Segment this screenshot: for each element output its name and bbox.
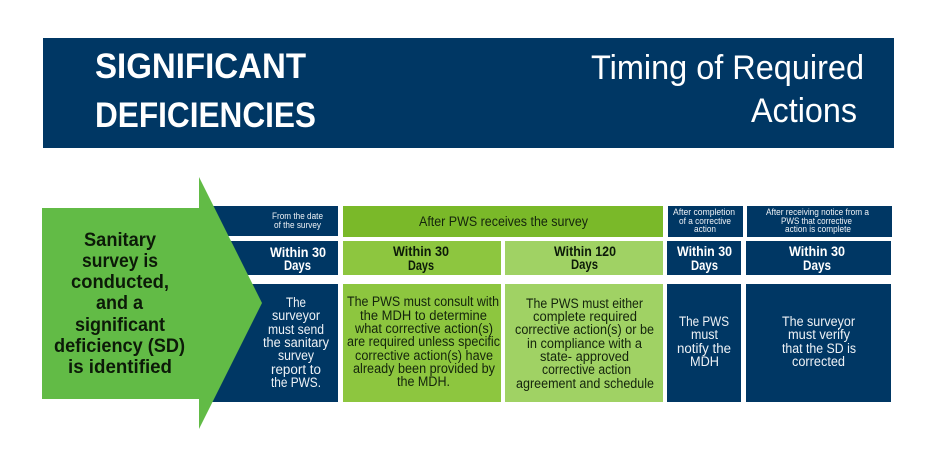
column 4 deadline bbox=[667, 241, 741, 275]
column 1 condition bbox=[210, 206, 338, 236]
column 1 condition: From the date bbox=[272, 211, 323, 221]
column 5 deadline bbox=[746, 241, 891, 275]
column 2 action: what corrective action(s) bbox=[354, 321, 493, 336]
header banner bbox=[43, 38, 894, 148]
column 4 deadline: Within 30 bbox=[677, 244, 732, 259]
column 4 condition: After completion bbox=[673, 207, 735, 217]
column 1 action: The bbox=[286, 295, 306, 310]
column 4 condition: action bbox=[694, 224, 716, 234]
subtitle: Timing of Required Actions bbox=[591, 49, 864, 130]
column 3 action bbox=[505, 284, 663, 402]
column 5 action: corrected bbox=[792, 354, 845, 369]
title: Significant Deficiencies bbox=[95, 47, 316, 135]
column 2 action: The PWS must consult with bbox=[347, 294, 499, 309]
column 5 deadline: Days bbox=[803, 258, 831, 273]
column 4 action: The PWS bbox=[679, 314, 729, 329]
column 1 condition: of the survey bbox=[274, 220, 321, 230]
title: Significant Deficiencies: DEFICIENCIES bbox=[95, 96, 316, 135]
column 1 action: must send bbox=[268, 322, 324, 337]
arrow: sanitary survey is conducted: Sanitary bbox=[84, 230, 156, 251]
column 4 action: must bbox=[691, 327, 718, 342]
column 1 action: the sanitary bbox=[263, 335, 329, 350]
arrow: sanitary survey is conducted: is identified bbox=[68, 357, 172, 378]
column 4 action bbox=[667, 284, 741, 402]
column 3 action: complete required bbox=[533, 309, 637, 324]
green heading: After PWS receives the survey bbox=[343, 206, 663, 237]
column 1 action bbox=[210, 284, 338, 402]
arrow: sanitary survey is conducted: conducted, bbox=[71, 272, 169, 293]
column 3 action: state- approved bbox=[540, 349, 629, 364]
subtitle: Timing of Required Actions: Timing of Required bbox=[591, 49, 864, 87]
column 1 deadline: Days bbox=[284, 258, 311, 273]
column 3 deadline: Within 120 bbox=[554, 244, 616, 259]
column 3: PWS completes corrective action bbox=[505, 241, 663, 402]
column 5 condition: PWS that corrective bbox=[781, 216, 852, 226]
column 2 action: already been provided by bbox=[353, 361, 495, 376]
arrow: sanitary survey is conducted: and a bbox=[96, 293, 143, 314]
green heading: After PWS receives the survey: After PWS receives the survey bbox=[419, 214, 588, 229]
column 2 deadline: Within 30 bbox=[393, 244, 449, 259]
column 2 deadline bbox=[343, 241, 501, 275]
column 3 action: in compliance with a bbox=[527, 336, 642, 351]
column 4 action: notify the bbox=[677, 341, 731, 356]
column 3 action: The PWS must either bbox=[526, 296, 643, 311]
column 2 action: are required unless specific bbox=[347, 334, 500, 349]
column 5 action: that the SD is bbox=[782, 341, 856, 356]
column 1 action: report to bbox=[271, 362, 321, 377]
column 5 action: must verify bbox=[788, 327, 850, 342]
column 4 action: MDH bbox=[690, 354, 719, 369]
column 5 action: The surveyor bbox=[782, 314, 855, 329]
column 2 deadline: Days bbox=[408, 258, 434, 273]
column 1 deadline: Within 30 bbox=[270, 245, 326, 260]
column 5 condition bbox=[747, 206, 892, 237]
column 2 action: corrective action(s) have bbox=[355, 348, 493, 363]
column 5 action bbox=[746, 284, 891, 402]
column 2 action: the MDH to determine bbox=[360, 308, 487, 323]
column 3 action: corrective action(s) or be bbox=[515, 322, 654, 337]
arrow: sanitary survey is conducted bbox=[42, 177, 262, 429]
arrow: sanitary survey is conducted: significant bbox=[75, 315, 166, 336]
column 3 deadline bbox=[505, 241, 663, 275]
column 1 action: surveyor bbox=[272, 308, 320, 323]
arrow: sanitary survey is conducted: deficiency (SD) bbox=[54, 336, 185, 357]
column 3 action: corrective action bbox=[542, 362, 631, 377]
column 5: surveyor verifies correction bbox=[746, 206, 892, 402]
column 4 condition: of a corrective bbox=[679, 216, 731, 226]
column 5 condition: action is complete bbox=[785, 224, 851, 234]
column 1 action: the PWS. bbox=[271, 375, 321, 390]
column 2: PWS consults MDH bbox=[343, 241, 501, 402]
column 4: PWS notifies MDH bbox=[667, 206, 743, 402]
column 4 deadline: Days bbox=[691, 258, 718, 273]
column 2 action bbox=[343, 284, 501, 402]
column 1: surveyor sends report bbox=[210, 206, 338, 402]
column 1 deadline bbox=[210, 241, 338, 275]
arrow: sanitary survey is conducted: survey is bbox=[82, 251, 158, 272]
column 4 condition bbox=[668, 206, 743, 237]
column 3 action: agreement and schedule bbox=[516, 376, 654, 391]
column 1 action: survey bbox=[278, 348, 314, 363]
column 2 action: the MDH. bbox=[397, 374, 450, 389]
column 5 deadline: Within 30 bbox=[789, 244, 845, 259]
title: Significant Deficiencies: SIGNIFICANT bbox=[95, 47, 306, 86]
subtitle: Timing of Required Actions: Actions bbox=[751, 92, 857, 130]
column 3 deadline: Days bbox=[571, 257, 598, 272]
column 5 condition: After receiving notice from a bbox=[766, 207, 869, 217]
